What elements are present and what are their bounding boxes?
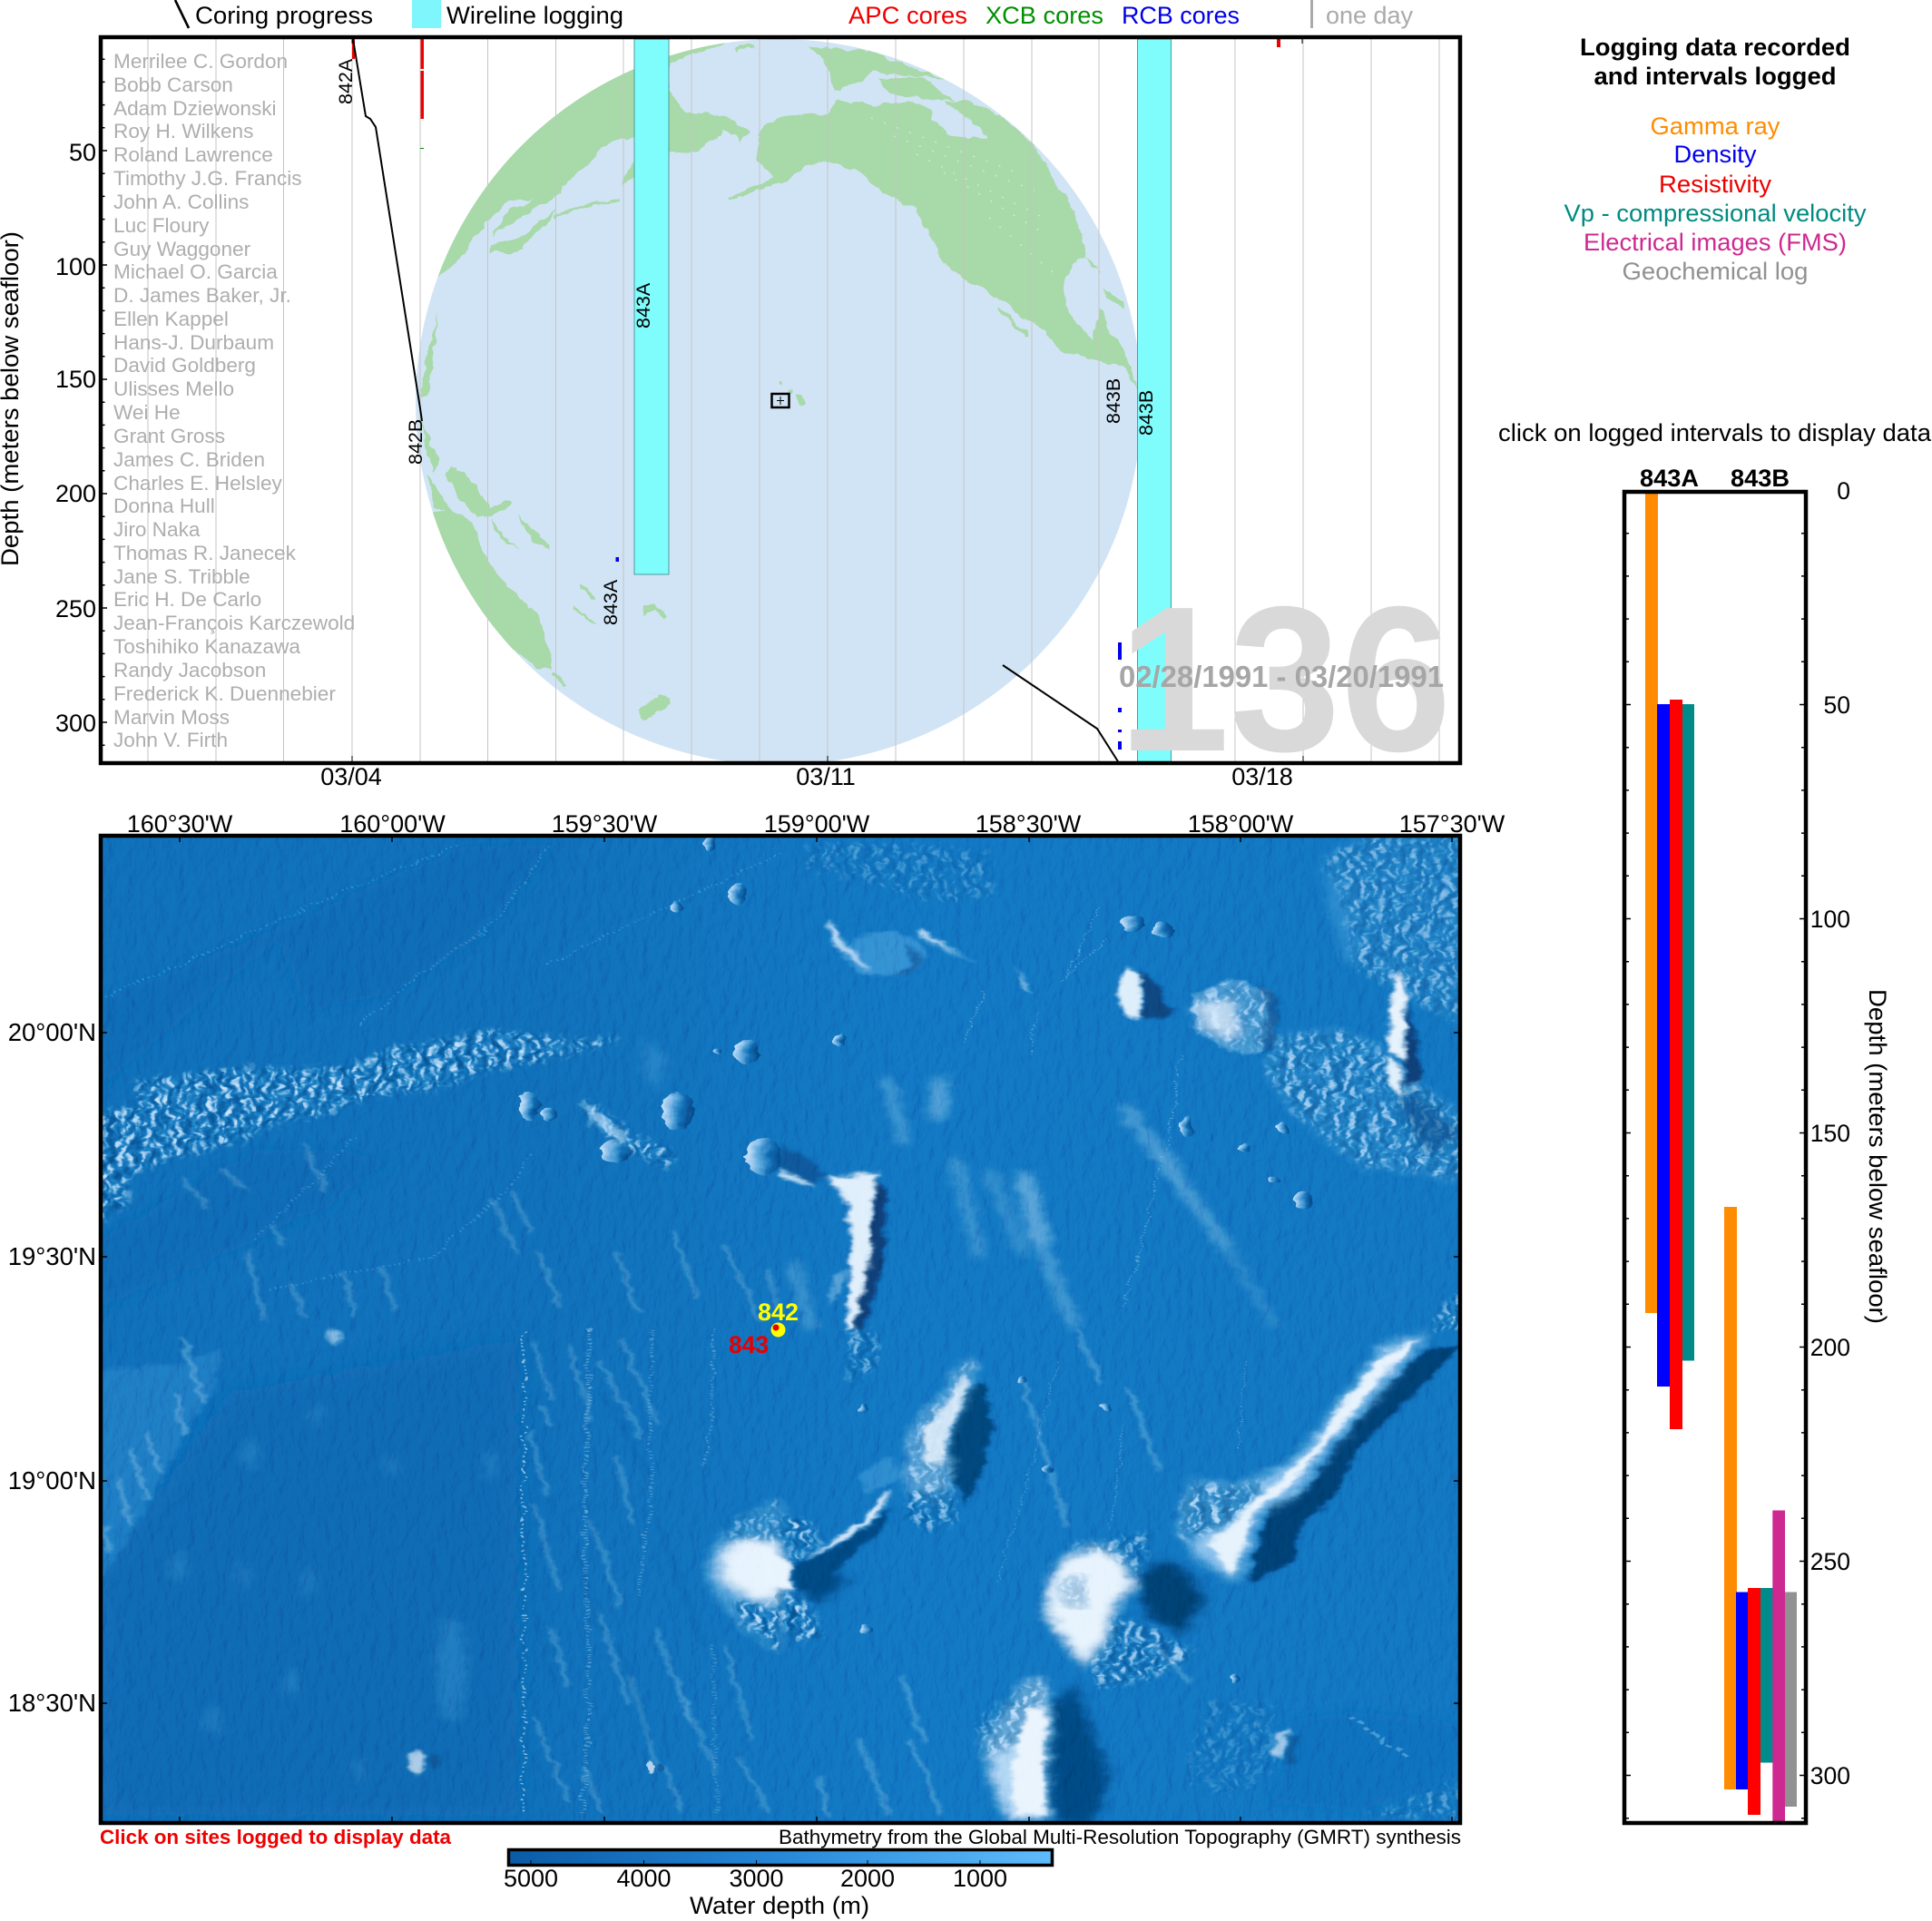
axis labels: latitude bbox=[8, 1018, 96, 1717]
instruction: click on logged intervals: click on logged intervals to display data bbox=[1498, 419, 1931, 446]
axis labels: latitude: 19°30'N bbox=[8, 1242, 96, 1270]
label: wireline logging: Wireline logging bbox=[446, 2, 623, 29]
expedition dates: 02/28/1991 - 03/20/1991 bbox=[1119, 660, 1444, 693]
text block: scientific party names: James C. Briden bbox=[113, 448, 265, 471]
text block: scientific party names: Marvin Moss bbox=[113, 706, 230, 729]
hole labels on timeline: 842B bbox=[405, 419, 427, 465]
bathymetry background bbox=[101, 836, 1460, 1823]
hole labels on timeline: 843A bbox=[633, 282, 654, 328]
text block: scientific party names: Adam Dziewonski bbox=[113, 97, 277, 120]
colour bar: water depth: 5000 bbox=[504, 1865, 558, 1892]
axis labels: latitude: 18°30'N bbox=[8, 1689, 96, 1717]
label: XCB cores: XCB cores bbox=[986, 2, 1103, 29]
frame bbox=[101, 37, 1460, 763]
legend: log types: Electrical images (FMS) bbox=[1584, 229, 1847, 256]
panel: logged intervals chart bbox=[1624, 465, 1891, 1823]
faulted band northwest bbox=[100, 1348, 226, 1582]
axis labels: dates: 03/11 bbox=[796, 763, 856, 790]
site markers bbox=[771, 1323, 786, 1338]
wireline logging: hole 843A bbox=[634, 39, 669, 574]
axis labels: depth values: 200 bbox=[1810, 1334, 1850, 1361]
text block: scientific party names: Roland Lawrence bbox=[113, 143, 273, 166]
land: Tasmania, New Zealand and Pacific islands bbox=[552, 583, 672, 720]
site label 842: 842 bbox=[758, 1299, 799, 1326]
text block: scientific party names: John A. Collins bbox=[113, 191, 249, 213]
label: one day: one day bbox=[1326, 2, 1413, 29]
text block: scientific party names: Ulisses Mello bbox=[113, 377, 234, 400]
day gridlines bbox=[148, 39, 1439, 762]
swath edge noise lines bbox=[524, 1329, 716, 1815]
axis labels: depth values: 100 bbox=[1810, 906, 1850, 933]
text block: scientific party names: Jean-François Karczewold bbox=[113, 612, 355, 634]
axis labels: depth values: 100 bbox=[55, 253, 96, 280]
hole header 843B: 843B bbox=[1731, 465, 1790, 492]
hole header 843A: 843A bbox=[1640, 465, 1699, 492]
text block: scientific party names: Jane S. Tribble bbox=[113, 565, 250, 588]
seamount highlight bbox=[410, 1751, 424, 1775]
axis labels: dates: 03/04 bbox=[320, 763, 382, 790]
colour bar: water depth: 1000 bbox=[953, 1865, 1007, 1892]
text block: scientific party names: Thomas R. Janecek bbox=[113, 542, 297, 564]
legend: log types: Gamma ray bbox=[1650, 113, 1780, 140]
label: APC cores: APC cores bbox=[848, 2, 967, 29]
axis labels: longitude: 158°00'W bbox=[1188, 810, 1294, 838]
text block: scientific party names: Ellen Kappel bbox=[113, 308, 229, 330]
colour bar: water depth: 3000 bbox=[729, 1865, 784, 1892]
land: Asia bbox=[437, 43, 750, 278]
axis labels: longitude: 159°00'W bbox=[764, 810, 870, 838]
axis labels: depth values: 150 bbox=[1810, 1120, 1850, 1147]
ridge south of site 842 bbox=[780, 1145, 887, 1329]
axis labels: dates: 03/18 bbox=[1231, 763, 1293, 790]
colour bar title: Water depth (m) bbox=[690, 1892, 869, 1919]
text block: scientific party names: Charles E. Helsley bbox=[113, 472, 283, 495]
axis labels: depth values: 150 bbox=[55, 366, 96, 393]
text block: scientific party names: Donna Hull bbox=[113, 495, 215, 517]
text block: scientific party names: Hans-J. Durbaum bbox=[113, 331, 274, 354]
text block: scientific party names: John V. Firth bbox=[113, 729, 228, 751]
globe: Pacific hemisphere bbox=[399, 18, 1142, 765]
note: bathymetry credit: Bathymetry from the Global Multi-Resolution Topography (GMRT) synthesis bbox=[779, 1826, 1461, 1848]
legend: log types bbox=[1564, 113, 1867, 285]
northeast ridge bbox=[1180, 1332, 1461, 1582]
legend: log types: Geochemical log bbox=[1623, 258, 1808, 285]
axis labels: depth values: 300 bbox=[1810, 1762, 1850, 1789]
line: coring progress hole 843 bbox=[1003, 665, 1118, 762]
axis labels: latitude: 20°00'N bbox=[8, 1018, 96, 1046]
axis labels: depth values bbox=[55, 139, 96, 737]
text block: scientific party names: Frederick K. Duennebier bbox=[113, 682, 336, 705]
volcanic ridge bbox=[100, 1005, 616, 1207]
chart frame bbox=[1624, 492, 1806, 1823]
axis labels: dates bbox=[320, 763, 1293, 790]
land speckle: lakes bbox=[871, 118, 1053, 272]
mottled terrain east bbox=[1267, 1031, 1461, 1181]
colour bar: water depth bbox=[504, 1849, 1053, 1919]
hole labels on timeline: 842A bbox=[335, 58, 357, 104]
legend: log types: Density bbox=[1673, 141, 1757, 168]
heading: logging data: Logging data recorded bbox=[1580, 34, 1850, 61]
line: coring progress hole 842 bbox=[353, 39, 422, 421]
text block: scientific party names: Grant Gross bbox=[113, 425, 225, 447]
text block: scientific party names: Merrilee C. Gordon bbox=[113, 50, 288, 73]
label: coring progress: Coring progress bbox=[195, 2, 373, 29]
central volcano bbox=[1045, 1531, 1206, 1689]
legend: log types: Resistivity bbox=[1659, 171, 1772, 198]
panel: coring timeline with globe bbox=[0, 18, 1460, 795]
connecting ridge bbox=[793, 1455, 902, 1592]
frame bbox=[101, 836, 1460, 1823]
text block: scientific party names: Wei He bbox=[113, 401, 181, 424]
relief: southeast sector bbox=[763, 1329, 1461, 1824]
land: North America bbox=[729, 100, 1142, 399]
text block: scientific party names bbox=[113, 50, 355, 751]
axis labels: depth values: 300 bbox=[55, 710, 96, 737]
axis labels: longitude: 160°30'W bbox=[127, 810, 233, 838]
box: Hawaii location marker on globe bbox=[771, 394, 789, 407]
icon: coring progress line bbox=[175, 0, 189, 28]
chart ticks bbox=[1626, 704, 1804, 1775]
hole labels on timeline: 843A bbox=[600, 579, 622, 625]
land: Indonesia and New Guinea bbox=[420, 408, 551, 550]
axis labels: depth values: 200 bbox=[55, 480, 96, 507]
land: Kamchatka, Sakhalin and Japan bbox=[421, 162, 633, 397]
relief: northwest sector bbox=[100, 838, 782, 1320]
legend: coring and logging key bbox=[175, 0, 1413, 29]
panel: bathymetry map bbox=[8, 810, 1505, 1824]
logged bars: hole 843B bbox=[1724, 1207, 1797, 1822]
text block: scientific party names: Luc Floury bbox=[113, 214, 210, 237]
axis labels: depth values: 250 bbox=[1810, 1548, 1850, 1575]
depth axis ticks bbox=[103, 151, 107, 722]
axis labels: longitude: 158°30'W bbox=[976, 810, 1082, 838]
light streaks bbox=[793, 1078, 1275, 1329]
hole labels on timeline bbox=[335, 58, 1157, 625]
text block: scientific party names: Eric H. De Carlo bbox=[113, 588, 261, 611]
axis labels: longitude: 159°30'W bbox=[552, 810, 658, 838]
text block: scientific party names: Michael O. Garcia bbox=[113, 260, 278, 283]
text block: scientific party names: Guy Waggoner bbox=[113, 238, 251, 260]
text block: scientific party names: Roy H. Wilkens bbox=[113, 120, 253, 142]
ridge north central bbox=[846, 1329, 993, 1531]
note: click instruction: Click on sites logged to display data bbox=[100, 1826, 452, 1848]
label: RCB cores: RCB cores bbox=[1122, 2, 1240, 29]
text block: scientific party names: Jiro Naka bbox=[113, 518, 201, 541]
seamount pair bbox=[1117, 967, 1280, 1053]
wireline logging: hole 843B bbox=[1138, 39, 1171, 762]
colour bar: water depth: 2000 bbox=[840, 1865, 895, 1892]
volcano west flank bbox=[708, 1500, 780, 1651]
text block: scientific party names: Toshihiko Kanazawa bbox=[113, 635, 300, 658]
land: Hawaiian Islands bbox=[777, 381, 805, 405]
heading: logging data second line: and intervals logged bbox=[1594, 63, 1837, 90]
icon: wireline logging swatch bbox=[412, 0, 441, 28]
axis labels: depth values: 50 bbox=[1824, 691, 1850, 719]
site label 843: 843 bbox=[729, 1331, 769, 1358]
axis labels: depth values: 250 bbox=[55, 595, 96, 622]
icon: one day scale bar bbox=[1310, 0, 1313, 28]
axis labels: longitude: 157°30'W bbox=[1399, 810, 1505, 838]
lower volcano bbox=[976, 1676, 1111, 1824]
faint streaks and small seamounts bbox=[819, 1329, 1193, 1815]
ridge blade east bbox=[1384, 970, 1418, 1097]
volcano west shadow bbox=[763, 1515, 850, 1642]
hole labels on timeline: 843B bbox=[1103, 378, 1124, 424]
legend: log types: Vp - compressional velocity bbox=[1564, 200, 1867, 227]
land: Australia bbox=[428, 511, 554, 669]
relief: southwest sector bbox=[100, 1329, 780, 1815]
terrain near southeast corner bbox=[1184, 1701, 1280, 1796]
axis title: depth: Depth (meters below seafloor) bbox=[1864, 989, 1891, 1324]
text block: scientific party names: Randy Jacobson bbox=[113, 659, 266, 681]
text block: scientific party names: David Goldberg bbox=[113, 354, 256, 377]
seamount cluster north bbox=[807, 844, 1033, 995]
colour bar: water depth: 4000 bbox=[616, 1865, 672, 1892]
land: Canadian Arctic islands and Baja bbox=[735, 44, 1125, 338]
map graticule ticks bbox=[103, 838, 1458, 1821]
axis labels: depth values: 50 bbox=[69, 139, 96, 166]
text block: scientific party names: Bobb Carson bbox=[113, 74, 233, 96]
axis labels: depth values bbox=[1810, 477, 1850, 1789]
logged bars: hole 843A bbox=[1645, 492, 1694, 1429]
axis labels: longitude bbox=[127, 810, 1505, 838]
hole labels on timeline: 843B bbox=[1135, 390, 1157, 436]
axis labels: depth values: 0 bbox=[1837, 477, 1850, 505]
text block: scientific party names: D. James Baker, Jr. bbox=[113, 284, 291, 307]
date ticks bbox=[352, 39, 1303, 761]
texture overlay bbox=[101, 836, 1460, 1823]
axis labels: longitude: 160°00'W bbox=[339, 810, 446, 838]
core bars: APC, XCB, RCB bbox=[352, 39, 1280, 750]
expedition number watermark: 136 bbox=[1118, 564, 1452, 795]
axis labels: latitude: 19°00'N bbox=[8, 1466, 96, 1495]
text block: scientific party names: Timothy J.G. Francis bbox=[113, 167, 302, 190]
relief: northeast sector bbox=[780, 838, 1461, 1329]
